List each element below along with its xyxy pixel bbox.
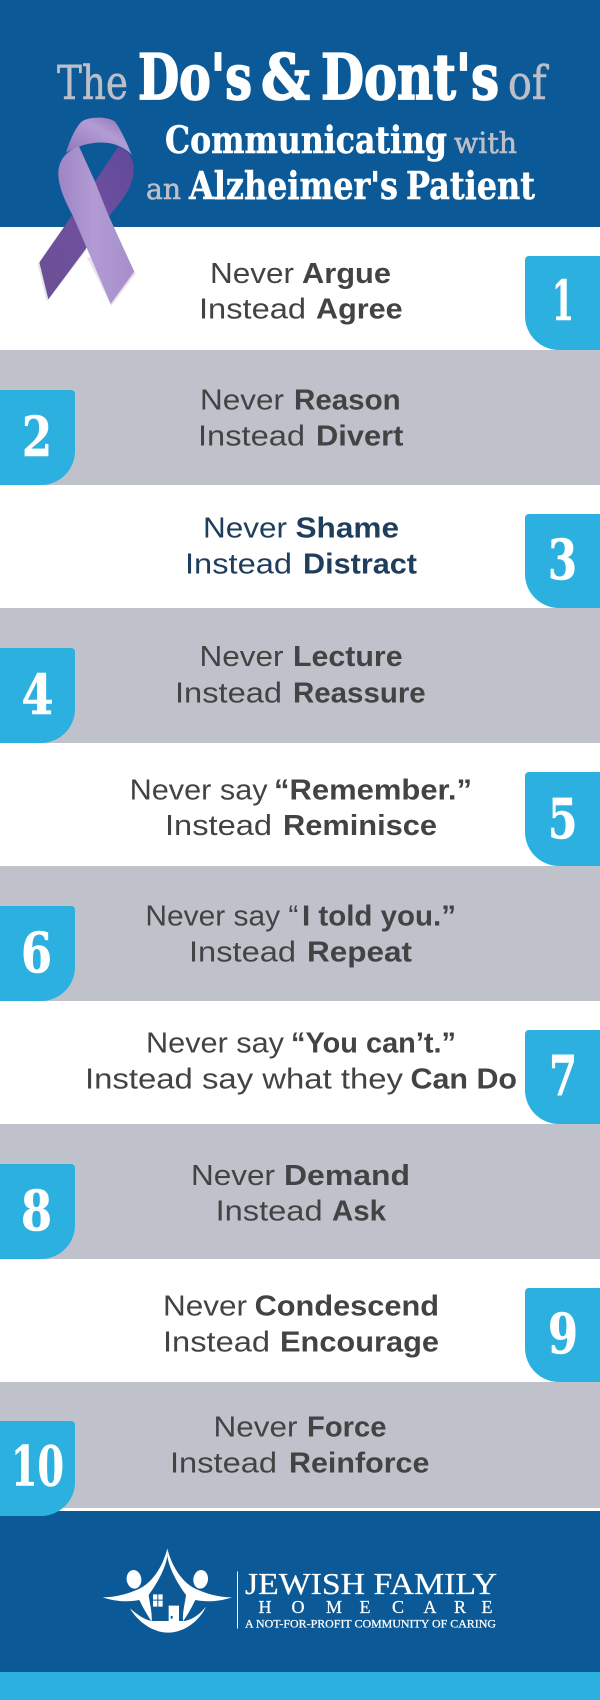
number badge 8 bbox=[0, 1164, 75, 1259]
row 7 bbox=[0, 1001, 600, 1124]
row text: Argue bbox=[302, 258, 391, 290]
row text: Never bbox=[191, 1160, 275, 1192]
number badge 6: 6 bbox=[21, 920, 52, 985]
title line 3: an bbox=[146, 172, 181, 206]
title line 3 bbox=[146, 163, 535, 208]
row 3 bbox=[0, 485, 600, 608]
number badge 4: 4 bbox=[22, 662, 54, 727]
number badge 10 bbox=[0, 1421, 75, 1516]
number badge 6 bbox=[0, 906, 75, 1001]
icon: house and family mark bbox=[103, 1548, 232, 1633]
row text bbox=[170, 1412, 429, 1480]
row text: Never bbox=[200, 641, 284, 673]
row text bbox=[85, 1028, 517, 1096]
row text: Lecture bbox=[293, 641, 403, 673]
row 9 bbox=[0, 1259, 600, 1382]
row text: Agree bbox=[316, 294, 403, 326]
logo wordmark: JEWISH FAMILY bbox=[245, 1566, 497, 1601]
row text: Never bbox=[214, 1412, 298, 1444]
row text bbox=[145, 900, 456, 968]
number badge 1: 1 bbox=[552, 268, 574, 333]
row background bbox=[0, 608, 600, 743]
header panel bbox=[0, 0, 600, 227]
row text bbox=[175, 641, 426, 710]
row text: Reminisce bbox=[283, 810, 437, 842]
title line 1 bbox=[57, 40, 550, 114]
number badge 1 bbox=[525, 256, 600, 350]
row text: Instead bbox=[163, 1326, 270, 1358]
row background bbox=[0, 227, 600, 350]
title line 1: The bbox=[57, 56, 128, 111]
row text: Can Do bbox=[410, 1064, 517, 1096]
title line 2: with bbox=[454, 126, 517, 160]
number badge 5 bbox=[525, 772, 600, 866]
footer logo bbox=[103, 1548, 497, 1633]
logo tagline: A NOT-FOR-PROFIT COMMUNITY OF CARING bbox=[245, 1619, 496, 1631]
row text: Divert bbox=[316, 420, 404, 452]
title line 3: Alzheimer's bbox=[188, 163, 398, 208]
row text: Distract bbox=[303, 548, 417, 580]
row background bbox=[0, 350, 600, 485]
row 1 bbox=[0, 227, 600, 350]
row 8 bbox=[0, 1124, 600, 1259]
row text: Never say bbox=[130, 774, 268, 806]
row text: Instead bbox=[216, 1196, 323, 1228]
number badge 9 bbox=[525, 1288, 600, 1382]
number badge 9: 9 bbox=[548, 1301, 578, 1366]
logo divider bbox=[237, 1572, 238, 1628]
number badge 8: 8 bbox=[21, 1178, 52, 1243]
row 2 bbox=[0, 350, 600, 485]
title line 1: of bbox=[508, 56, 550, 111]
title line 2: Communicating bbox=[165, 118, 447, 162]
row text: Instead bbox=[198, 420, 305, 452]
row text: Never bbox=[203, 512, 287, 544]
row text: Instead bbox=[165, 810, 272, 842]
row text: Instead bbox=[170, 1448, 277, 1480]
row text: Never bbox=[163, 1290, 247, 1322]
row text: Reason bbox=[294, 384, 401, 416]
number badge 3 bbox=[525, 514, 600, 608]
row text bbox=[130, 774, 472, 842]
number badge 5: 5 bbox=[548, 786, 578, 851]
row 4 bbox=[0, 608, 600, 743]
row text: Encourage bbox=[280, 1326, 439, 1358]
row text: Force bbox=[307, 1412, 386, 1444]
number badge 2 bbox=[0, 390, 75, 485]
number badge 7 bbox=[525, 1030, 600, 1124]
row text bbox=[198, 384, 404, 452]
row text bbox=[191, 1160, 410, 1228]
title bbox=[57, 40, 550, 208]
row text bbox=[185, 512, 417, 580]
row text: Repeat bbox=[307, 936, 412, 968]
row text: I told you.” bbox=[302, 900, 456, 932]
row background bbox=[0, 866, 600, 1001]
title line 1: & bbox=[261, 40, 310, 114]
row text: Instead bbox=[189, 936, 296, 968]
title line 1: Dont's bbox=[321, 40, 499, 114]
row text: Reinforce bbox=[289, 1448, 429, 1480]
footer panel bbox=[0, 1511, 600, 1672]
row text: Instead say what they bbox=[85, 1064, 404, 1096]
row text: “Remember.” bbox=[274, 774, 472, 806]
number badge 4 bbox=[0, 648, 75, 743]
footer accent band bbox=[0, 1672, 600, 1700]
number badge 7: 7 bbox=[549, 1043, 577, 1108]
row text: “You can’t.” bbox=[291, 1028, 456, 1060]
row text: Instead bbox=[175, 678, 282, 710]
row text: Condescend bbox=[255, 1290, 439, 1322]
row background bbox=[0, 1259, 600, 1382]
row background bbox=[0, 1124, 600, 1259]
number badge 2: 2 bbox=[22, 404, 52, 469]
row text bbox=[163, 1290, 439, 1358]
row text: Ask bbox=[332, 1196, 387, 1228]
row text: Instead bbox=[185, 548, 292, 580]
number badge 10: 10 bbox=[11, 1434, 64, 1498]
logo subtitle: HOME CARE bbox=[258, 1597, 492, 1617]
row text: Never bbox=[200, 384, 284, 416]
row text: Reassure bbox=[293, 678, 426, 710]
row background bbox=[0, 743, 600, 866]
row background bbox=[0, 485, 600, 608]
number badge 3: 3 bbox=[548, 527, 577, 592]
row text: Instead bbox=[199, 294, 306, 326]
row background bbox=[0, 1382, 600, 1508]
row text: Shame bbox=[296, 512, 399, 544]
icon: purple awareness ribbon bbox=[37, 118, 136, 306]
row background bbox=[0, 1001, 600, 1124]
row text bbox=[199, 258, 403, 326]
row 5 bbox=[0, 743, 600, 866]
row text: Never say “ bbox=[145, 900, 298, 932]
title line 1: Do's bbox=[138, 40, 252, 114]
title line 3: Patient bbox=[406, 163, 535, 208]
row text: Never say bbox=[146, 1028, 285, 1060]
row text: Demand bbox=[284, 1160, 410, 1192]
row 6 bbox=[0, 866, 600, 1001]
row text: Never bbox=[210, 258, 294, 290]
row 10 bbox=[0, 1382, 600, 1516]
